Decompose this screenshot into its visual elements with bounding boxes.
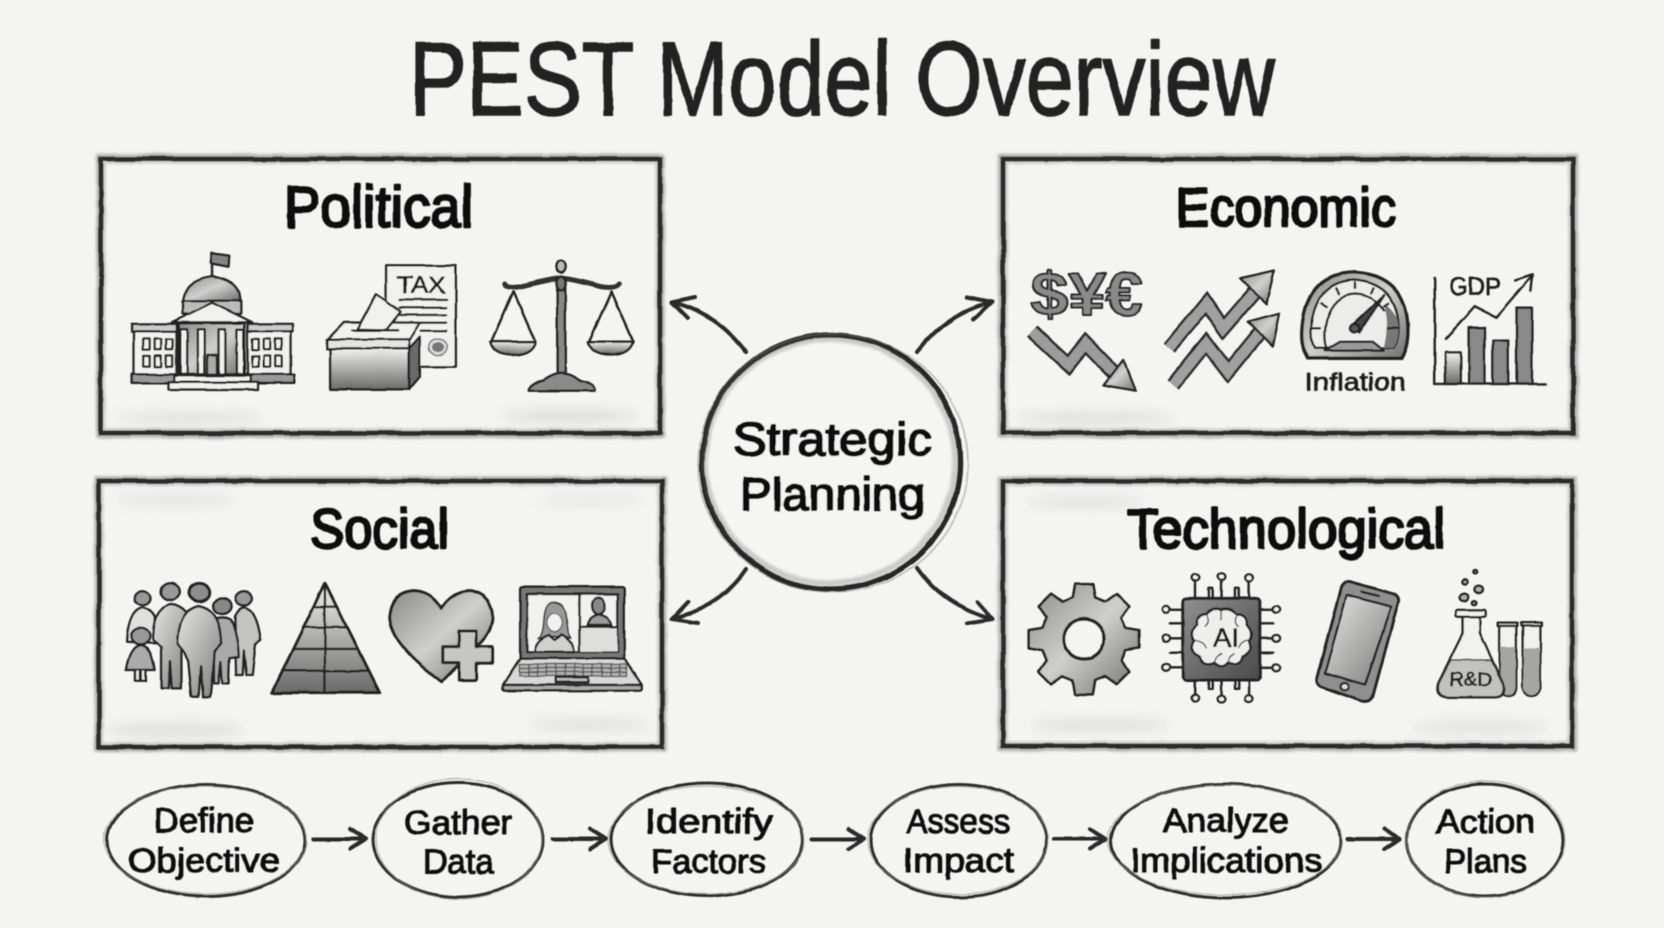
- panel: social: [96, 478, 665, 750]
- heading: political: Political: [284, 175, 473, 240]
- step: action plans: [1407, 781, 1565, 897]
- icon: capitol building: [132, 253, 294, 390]
- icon: rising arrows: [1169, 271, 1279, 385]
- title: PEST Model Overview: [409, 21, 1276, 138]
- step: action plans: Action: [1436, 803, 1535, 841]
- step: analyze implications: [1108, 784, 1342, 898]
- icon: laptop video call: [503, 587, 642, 691]
- arrow: step 3 to 4: [812, 829, 864, 849]
- arrow: step 2 to 3: [553, 829, 606, 849]
- step: gather data: [373, 779, 543, 899]
- step: analyze implications: Analyze: [1163, 802, 1289, 840]
- step: gather data: Data: [423, 843, 494, 881]
- label: TAX: TAX: [397, 272, 446, 299]
- label: inflation: Inflation: [1305, 369, 1406, 397]
- icon: group of people: [126, 583, 261, 697]
- step: assess impact: Impact: [903, 842, 1015, 880]
- step: assess impact: Assess: [906, 803, 1010, 841]
- step: identify factors: Identify: [645, 803, 773, 841]
- label: GDP: GDP: [1449, 273, 1501, 301]
- arrow: to technological: [917, 568, 993, 623]
- icon: currency symbols and falling arrow: $¥€: [1031, 261, 1143, 328]
- step: define objective: Define: [154, 802, 254, 840]
- center circle: strategic planning: [698, 334, 968, 592]
- icon: AI chip: [1162, 573, 1280, 703]
- arrow: step 5 to 6: [1348, 829, 1400, 849]
- process flow: [104, 779, 1565, 899]
- step: gather data: Gather: [404, 804, 512, 842]
- icon: balance scales: [490, 261, 633, 391]
- step: action plans: Plans: [1444, 843, 1527, 881]
- icon: flask and test tubes: [1437, 570, 1542, 697]
- heading: technological: Technological: [1127, 497, 1445, 560]
- icon: GDP chart: [1435, 273, 1546, 384]
- step: assess impact: [868, 784, 1048, 897]
- icon: heart with medical cross: [389, 591, 493, 682]
- arrow: step 4 to 5: [1054, 829, 1106, 849]
- icon: currency symbols and falling arrow: [1031, 261, 1143, 391]
- icon: smartphone: [1317, 582, 1399, 701]
- icon: inflation gauge: [1302, 272, 1408, 397]
- heading: social: Social: [310, 497, 449, 560]
- icon: gear: [1029, 584, 1139, 694]
- panel: technological: [999, 478, 1576, 750]
- heading: economic: Economic: [1176, 178, 1396, 238]
- step: identify factors: [608, 783, 804, 896]
- step: define objective: Objective: [128, 842, 280, 880]
- icon: ballot box and tax form: [327, 265, 456, 389]
- label: AI: AI: [1213, 623, 1239, 653]
- step: define objective: [104, 784, 306, 896]
- arrow: to social: [672, 569, 746, 623]
- arrow: to political: [672, 297, 746, 352]
- text: strategic: Strategic: [733, 413, 932, 465]
- step: identify factors: Factors: [651, 843, 766, 881]
- step: analyze implications: Implications: [1130, 842, 1322, 880]
- icon: population pyramid: [272, 583, 379, 693]
- text: planning: Planning: [740, 468, 925, 520]
- arrow: step 1 to 2: [313, 829, 366, 849]
- label: R&D: R&D: [1449, 670, 1492, 691]
- arrow: to economic: [917, 297, 992, 352]
- panel: political: [98, 155, 663, 437]
- panel: economic: [999, 155, 1577, 437]
